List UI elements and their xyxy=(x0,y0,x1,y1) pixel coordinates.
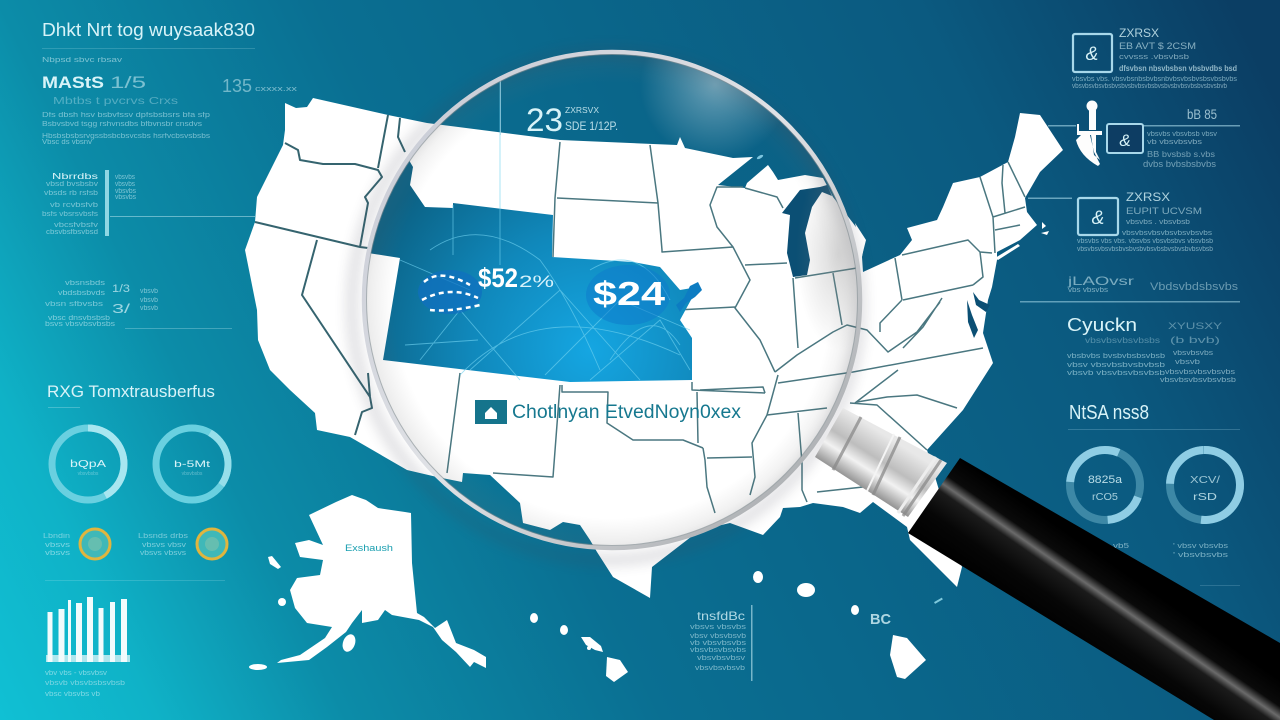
text block: description lines: Dfs dbsh hsv bsbvfssv dpfsbsbsrs bfa sfp xyxy=(42,112,210,119)
panel: left column upper stats: Nbpsd sbvc rbsav xyxy=(42,57,123,64)
text block: bottom center note: tnsfdBc xyxy=(697,609,745,623)
text block 1: vbsvbsvbsvbsbvsbvsbvbsvbsbvsbvsbvbsvbsbvsbvsbvb xyxy=(1072,83,1227,90)
donut chart 3: rCO5 xyxy=(1092,492,1118,503)
chart: vertical gauge with labels: vbsvbs xyxy=(115,194,136,201)
text block: donut captions: vb5 xyxy=(1113,543,1129,550)
donut chart 4 xyxy=(1169,449,1241,521)
panel: left column lower charts xyxy=(43,382,241,698)
chart: vertical gauge with labels: vbsd bvsbsbv xyxy=(46,181,99,188)
text block 3 xyxy=(1077,190,1213,253)
icon: yellow ring left xyxy=(43,529,110,559)
Long Island and Cape Cod xyxy=(855,222,1049,260)
text block: mid labels: Vbdsvbdsbsvbs xyxy=(1150,281,1239,293)
heading: left panel title: Dhkt Nrt tog wuysaak830 xyxy=(42,20,255,40)
lens shading xyxy=(364,52,860,548)
donut chart 3: 8825a xyxy=(1088,474,1123,486)
icon: yellow ring left: Lbndin xyxy=(43,533,70,540)
panel: left column upper stats: 135 xyxy=(222,76,252,96)
text block 2: bB 85 xyxy=(1187,106,1217,122)
text block 2: dvbs bvbsbsbvbs xyxy=(1143,159,1217,169)
text block: chart caption xyxy=(45,670,125,698)
text block 3: vbsvbsvbsvbsvbsvbsvbs xyxy=(1122,230,1213,237)
icon box 2: & xyxy=(1119,131,1131,150)
icon: yellow ring right: vbsvs vbsv xyxy=(142,542,187,549)
text block: donut captions: ' vbsvbsvbs xyxy=(1173,552,1229,559)
text block: right section 1 body: vbsvbsvbsvbsvbsb xyxy=(1160,377,1236,384)
lens rim xyxy=(364,52,860,548)
chart: vertical gauge with labels: vbsvbs xyxy=(115,181,135,188)
text block: right section 1 body: vbsvbsvbsvbsbs xyxy=(1085,336,1160,345)
magnifier ferrule xyxy=(815,408,947,517)
text block: lower stats: bsvs vbsvbsvbsbs xyxy=(45,321,116,328)
text block: chart caption: vbv vbs - vbsvbsv xyxy=(45,670,108,677)
text block: bottom center note: vbsvbsvbsvb xyxy=(695,665,745,672)
text block 3: EUPIT UCVSM xyxy=(1126,206,1202,216)
callout: 23 stat: SDE 1/12P. xyxy=(565,119,618,133)
text block: lower stats: vbsnsbds xyxy=(65,280,106,287)
chart: vertical gauge with labels: vbsds rb rsfsb xyxy=(44,190,98,197)
donut chart 4: rSD xyxy=(1193,492,1217,503)
label: boxed teal caption: Chotlnyan EtvedNoyn0xex xyxy=(512,402,741,423)
water: Lake Michigan and bays xyxy=(782,185,990,338)
chart: vertical gauge with labels: bsfs vbsrsvbsfs xyxy=(42,211,99,218)
text block: right section 1 body: (b bvb) xyxy=(1170,335,1220,345)
state borders xyxy=(255,115,1025,513)
text block: chart caption: vbsvb vbsvbsbsvbsb xyxy=(45,680,125,687)
bar chart xyxy=(46,597,130,662)
heading: left lower title: RXG Tomxtrausberfus xyxy=(47,382,215,401)
text block 2: BB bvsbsb s.vbs xyxy=(1147,150,1215,159)
callout: percent figure with dotted globe: $52 xyxy=(478,263,518,293)
panel: left column upper stats xyxy=(42,20,298,329)
chart: vertical gauge with labels: vbsvbs xyxy=(115,174,135,181)
text block: mid labels: vbs vbsvbs xyxy=(1068,287,1109,294)
text block: lower stats: vbsc dnsvbsbsb xyxy=(48,315,110,322)
heading: right section 1: Cyuckn xyxy=(1067,315,1137,335)
panel: left column upper stats: 1/5 xyxy=(110,73,146,92)
text block: right section 1 body: vbsv vbsvbsbvsbvbsb xyxy=(1067,362,1165,369)
panel: left column upper stats: cxxxx.xx xyxy=(255,86,298,93)
text block: right section 1 body: vbsvbsvbsvbsvbs xyxy=(1165,369,1236,376)
text block 1: EB AVT $ 2CSM xyxy=(1119,41,1196,51)
text block 3: vbsvbs . vbsvbsb xyxy=(1126,219,1190,226)
icon: yellow ring left: vbsvs xyxy=(45,542,71,549)
text block: donut captions: ' vbsv vbsvbs xyxy=(1173,543,1229,550)
text block: bottom center note: vbsvs vbsvbs xyxy=(690,624,747,631)
panel: left column upper stats: Bsbvsbvd tsgg rshvnsdbs bfbvnsbr cnsdvs xyxy=(42,121,203,128)
callout: 23 stat: 23 xyxy=(526,102,563,138)
donut chart 1: bQpA xyxy=(70,459,106,470)
donut chart 1 xyxy=(52,428,124,500)
text block: lower stats xyxy=(45,280,232,329)
text block: lower stats: 1/3 xyxy=(112,283,130,295)
panel: left column upper stats: Mbtbs t pvcrvs Crxs xyxy=(53,96,178,107)
text block 1: vbsvbs vbs. vbsvbsnbsbvbsnbvbsvbsbvsbsvbsbvbs xyxy=(1072,76,1238,83)
text block 3: vbsvbsvbsvbsbvsbvsbvbsvbsbvsbvsbvbsvbsb xyxy=(1077,246,1213,253)
callout: dollar figure: $24 xyxy=(593,275,666,312)
text block: chart caption: vbsc vbsvbs vb xyxy=(45,691,100,698)
heading: right section 2: NtSA nss8 xyxy=(1069,402,1149,424)
text block 1: cvvsss .vbsvbsb xyxy=(1119,54,1189,61)
text block: right section 1 body: vbsbvbs bvsbvbsbsvbsb xyxy=(1067,353,1165,360)
callout: 23 stat xyxy=(500,80,618,138)
text block: bottom center note: vbsv vbsvbsvb xyxy=(690,633,746,640)
chart: vertical gauge with labels: cbsvbsfbsvbsd xyxy=(46,229,98,236)
icon: blue splash xyxy=(676,282,702,312)
text block 1: dfsvbsn nbsvbsbsn vbsbvdbs bsd xyxy=(1119,64,1237,73)
text block 3: vbsvbs vbs vbs. vbsvbs vbsvbsbvs vbsvbsb xyxy=(1077,238,1213,245)
text block: bottom center note xyxy=(690,605,752,681)
label: BC: BC xyxy=(870,611,891,628)
icon box 3 xyxy=(1078,198,1118,235)
icon box 1: & xyxy=(1086,44,1098,65)
text block: right section 1 body: vbsvb vbsvbsvbsvbsb xyxy=(1067,370,1165,377)
text block: lower stats: vbdsbsbvds xyxy=(58,290,106,297)
chart: vertical gauge with labels: vb rcvbsfvb xyxy=(50,202,98,209)
panel: left column upper stats: Hbsbsbsbsrvgssbsbcbsvcsbs hsrfvcbsvsbsbs xyxy=(42,133,211,140)
highlighted blue region xyxy=(370,161,692,382)
icon: yellow ring right xyxy=(138,529,227,559)
magnifier handle xyxy=(908,458,1280,720)
text block: mid labels: jLAOvsr xyxy=(1066,274,1134,288)
text block: right section 1 body: vbsvb xyxy=(1175,359,1200,366)
text block 2 xyxy=(1143,106,1218,169)
text block: mid labels xyxy=(1066,274,1239,294)
text block: lower stats: 3/ xyxy=(112,301,131,316)
map: Hawaii islands xyxy=(530,571,943,682)
text block: bottom center note: vb vbsvbsvbs xyxy=(690,640,747,647)
text block: right section 1 body: vbsvbsvbs xyxy=(1173,350,1214,357)
text block 1: ZXRSX xyxy=(1119,26,1159,40)
lens glare xyxy=(647,58,774,153)
donut chart 3 xyxy=(1060,440,1150,530)
lens network lines xyxy=(400,80,690,380)
icon: white figure xyxy=(1076,100,1102,166)
chart: vertical gauge with labels: Nbrrdbs xyxy=(52,172,98,181)
text block: bottom center note: vbsvbsvbsvbs xyxy=(690,647,747,654)
icon: yellow ring right: vbsvs vbsvs xyxy=(140,550,187,557)
text block: right section 1 body xyxy=(1067,321,1236,384)
callout: percent figure with dotted globe xyxy=(418,263,554,314)
chart: vertical gauge with labels xyxy=(42,170,255,236)
donut chart 2 xyxy=(143,415,241,513)
text block: bottom center note: vbsvbsvbsv xyxy=(697,655,746,662)
text block: donut captions xyxy=(1113,543,1229,559)
donut chart 1: vbsvbsbs xyxy=(78,471,99,477)
land mass xyxy=(245,98,1063,598)
icon box 2 xyxy=(1107,124,1143,153)
chart: vertical gauge with labels: vbsvbs xyxy=(115,188,136,195)
icon: yellow ring right: Lbsnds drbs xyxy=(138,533,189,540)
icon box 1 xyxy=(1073,34,1112,72)
text block: lower stats: vbsvb xyxy=(140,288,158,295)
donut chart 4: XCV/ xyxy=(1190,475,1220,486)
donut chart 2: b-5Mt xyxy=(174,459,211,469)
text block: lower stats: vbsn sfbvsbs xyxy=(45,301,104,308)
callout: percent figure with dotted globe: 2% xyxy=(519,272,554,291)
panel: left column upper stats: Vbsc ds vbsnv xyxy=(42,139,93,146)
text block 3: ZXRSX xyxy=(1126,190,1170,204)
text block: lower stats: vbsvb xyxy=(140,305,158,312)
text block: right section 1 body: XYUSXY xyxy=(1168,321,1222,331)
map: Alaska xyxy=(249,495,486,670)
text block 2: vb vbsvbsvbs xyxy=(1147,139,1203,146)
lens shadow on map xyxy=(352,52,860,560)
panel: right column xyxy=(1020,26,1241,586)
Alaska label: Exshaush xyxy=(345,543,393,553)
callout: 23 stat: ZXRSVX xyxy=(565,106,600,115)
text block: lower stats: vbsvb xyxy=(140,297,158,304)
text block 1 xyxy=(1072,26,1238,90)
map: contiguous United States xyxy=(245,98,1063,598)
callout: dollar figure xyxy=(586,265,702,325)
text block 2: vbsvbs vbsvbsb vbsv xyxy=(1147,131,1218,138)
icon: yellow ring left: vbsvs xyxy=(45,550,71,557)
icon box 3: & xyxy=(1092,208,1104,229)
stat heading: MAStS xyxy=(42,73,104,92)
lens interior xyxy=(367,55,858,545)
donut chart 2: vbsvbsbs xyxy=(182,471,203,477)
Alaska islands xyxy=(249,556,358,670)
chart: vertical gauge with labels: vbcsfvbsfv xyxy=(54,222,99,229)
